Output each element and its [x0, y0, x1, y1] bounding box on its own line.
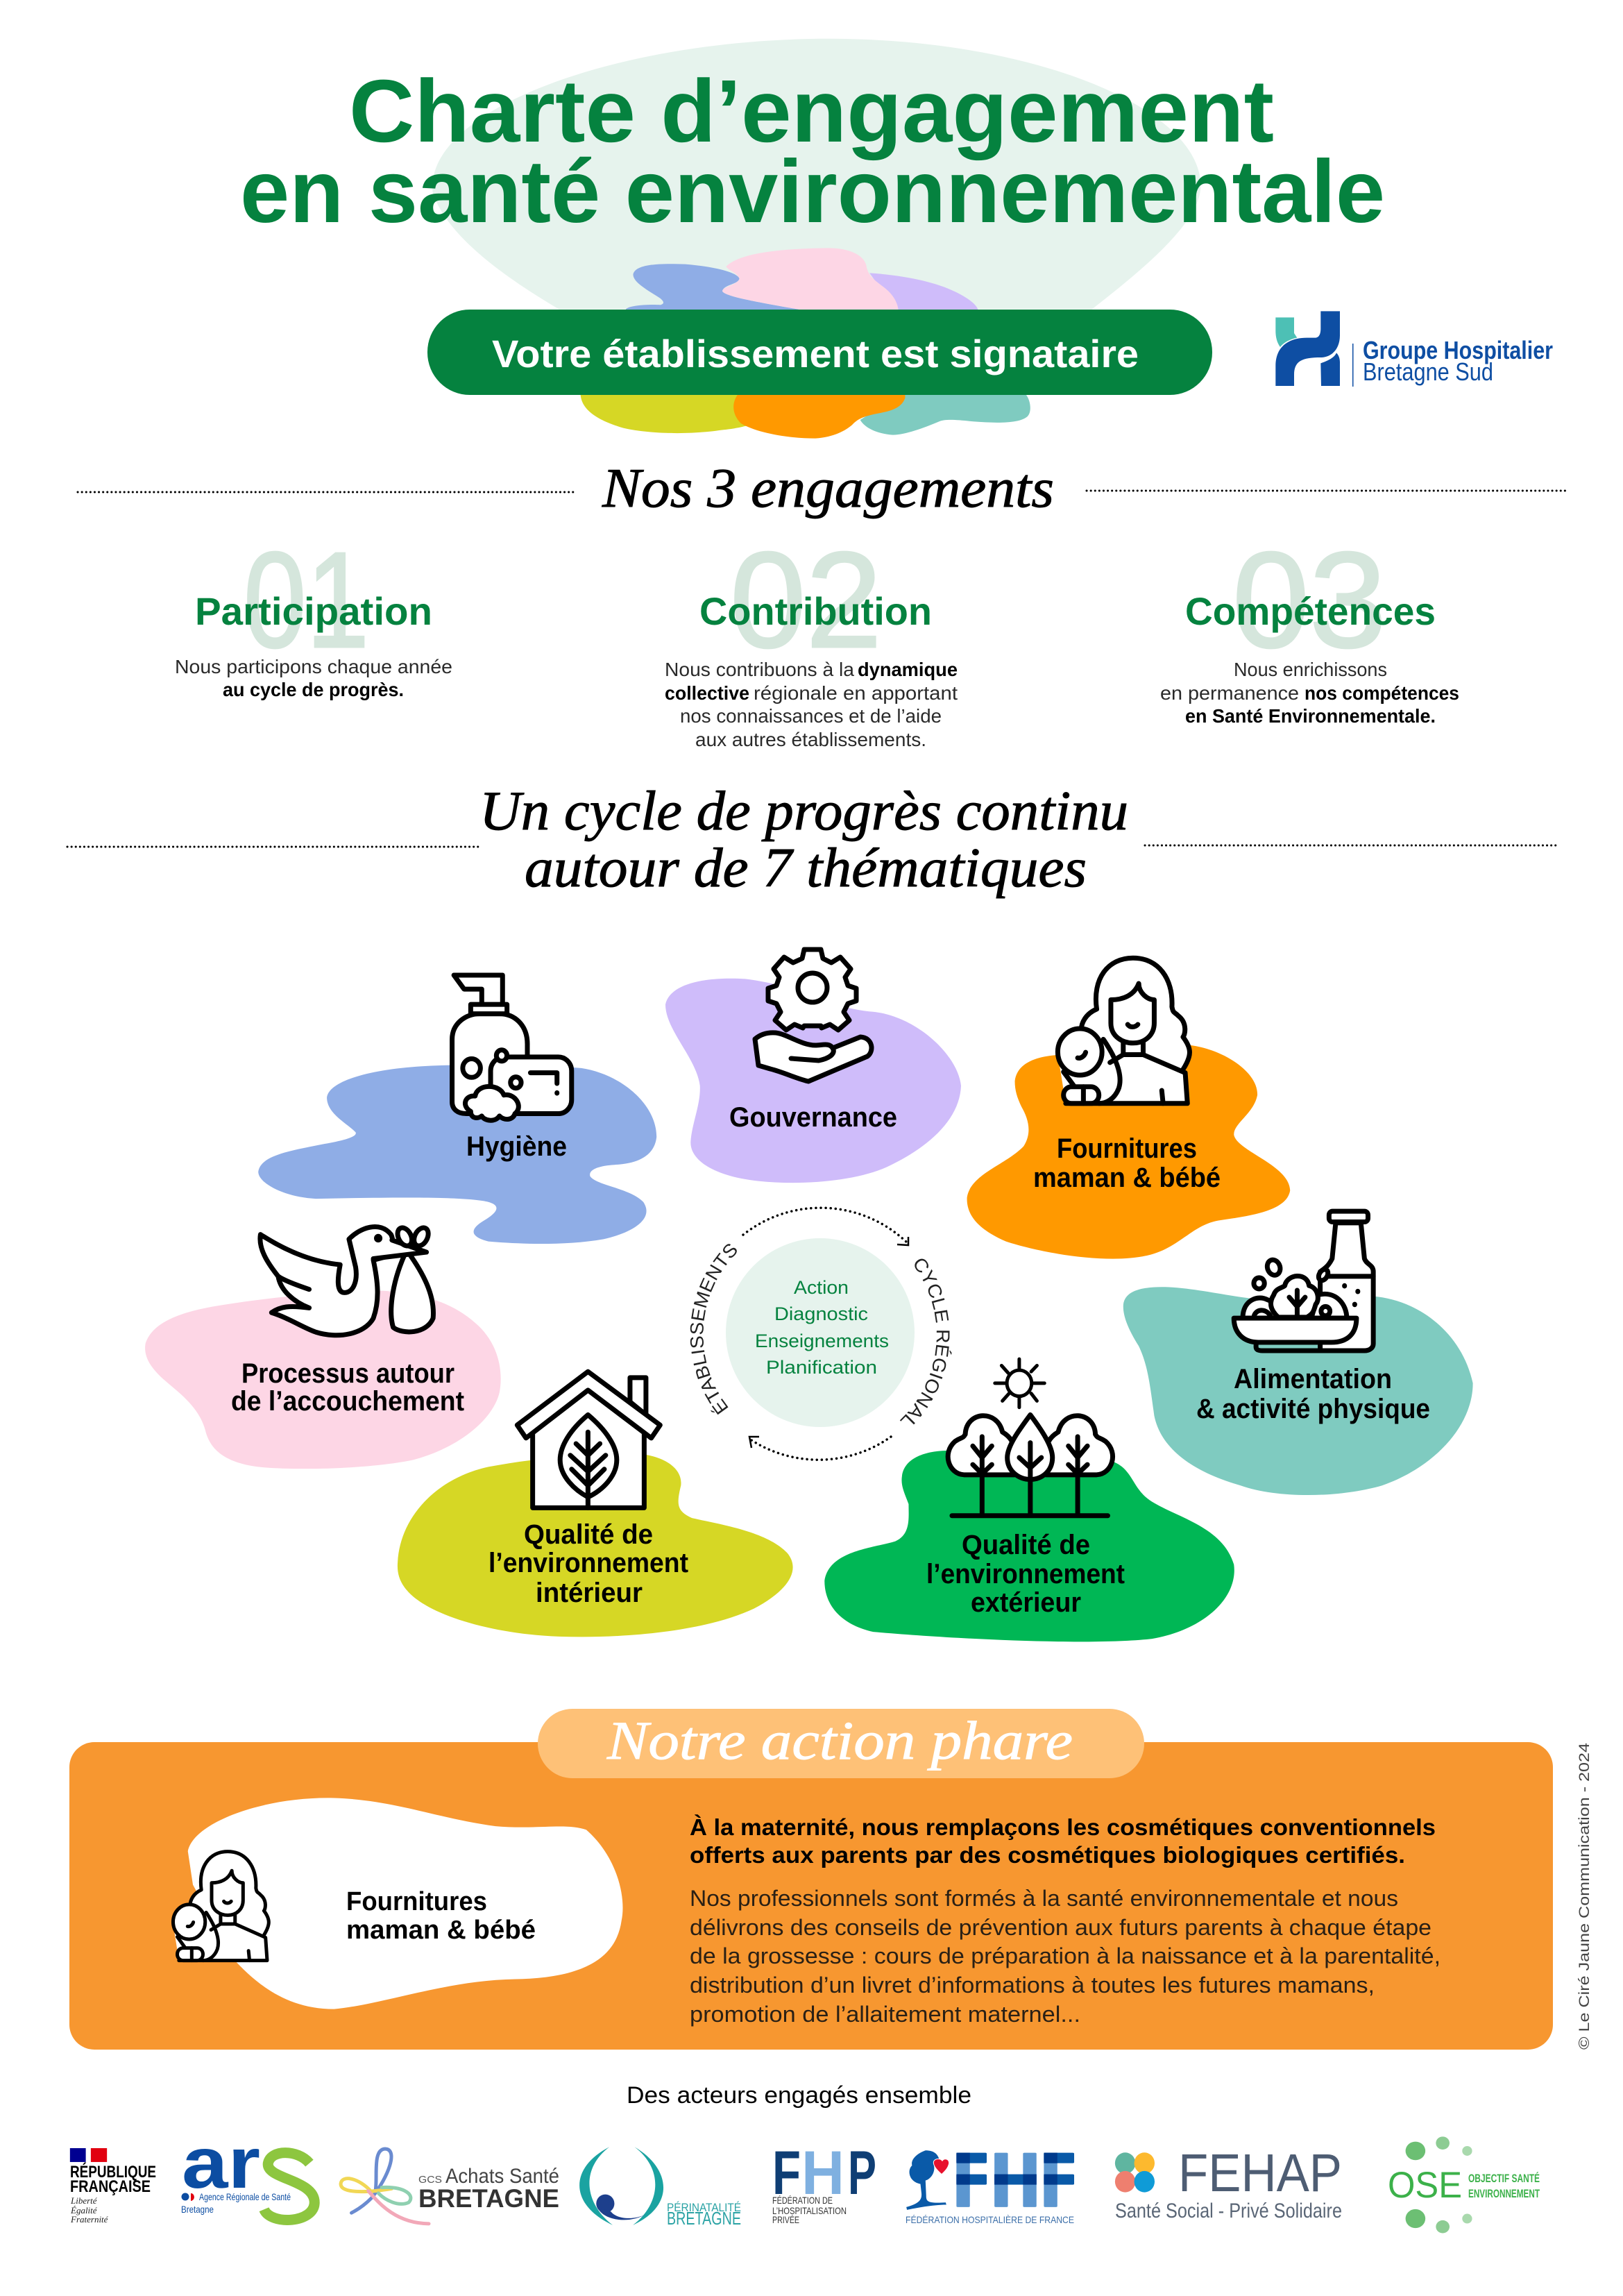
logo: ARS	[181, 2123, 314, 2220]
heading: cycle de progrès	[479, 781, 1128, 899]
cycle diagram	[690, 1206, 952, 1461]
logo: GCS Achats Santé Bretagne	[341, 2149, 559, 2224]
engagement 02: dynamique	[858, 659, 958, 680]
body text: de la grossesse : cours de préparation à la naissance et à la parentalité,	[690, 1943, 1441, 1968]
lead text: À la maternité, nous remplaçons les cosmétiques conventionnels	[690, 1814, 1436, 1840]
logo: FHP: FÉDÉRATION DE	[772, 2195, 833, 2206]
cycle diagram: Action	[794, 1277, 849, 1298]
theme: Fournitures maman & bébé	[967, 958, 1290, 1259]
logo: OSE: ENVIRONNEMENT	[1468, 2187, 1540, 2200]
logo: OSE: OSE	[1388, 2165, 1462, 2206]
logo: OSE	[1388, 2136, 1540, 2234]
engagement 01: Nous participons chaque année	[175, 656, 452, 677]
lead text: offerts aux parents par des cosmétiques biologiques certifiés.	[690, 1842, 1405, 1868]
panel heading pill	[538, 1709, 1144, 1778]
theme: Alimentation	[1123, 1211, 1473, 1495]
engagement 02: aux autres établissements.	[695, 729, 926, 750]
logo: République française: RÉPUBLIQUE	[70, 2162, 156, 2181]
body text: distribution d’un livret d’informations à toutes les futures mamans,	[690, 1973, 1375, 1998]
lead text	[690, 1814, 1436, 1868]
logo: Groupe Hospitalier Bretagne Sud	[1275, 311, 1553, 387]
cycle diagram: CYCLE RÉGIONAL	[899, 1259, 952, 1424]
theme: Processus autour de l'accouchement: Processus autour	[241, 1358, 454, 1389]
icon: house with leaf	[517, 1371, 660, 1508]
icon: gear and hand	[755, 949, 872, 1081]
logo: GCS Achats Santé Bretagne: GCS	[418, 2174, 442, 2186]
logo: Périnatalité Bretagne: BRETAGNE	[667, 2208, 741, 2229]
title	[240, 62, 1385, 242]
engagement 03: Nous enrichissons	[1234, 659, 1387, 680]
engagement 02: Contribution	[699, 589, 932, 633]
logo: FHP: PRIVÉE	[772, 2214, 799, 2225]
engagement 01: au cycle de progrès.	[223, 679, 404, 700]
theme: Fournitures maman & bébé: maman & bébé	[1033, 1163, 1221, 1193]
logo: OSE: OBJECTIF SANTÉ	[1468, 2172, 1540, 2185]
engagement 02: collective	[665, 682, 749, 704]
body text	[690, 1886, 1441, 2027]
heading: cycle de progrès: Un cycle de progrès continu	[479, 781, 1128, 842]
engagement 02: Nous contribuons à la	[665, 659, 854, 680]
logo: FEHAP	[1115, 2143, 1342, 2222]
engagement 01: 01	[244, 524, 369, 676]
logo: République française: Fraternité	[70, 2214, 109, 2225]
theme: Hygiène	[258, 975, 656, 1244]
engagement 01	[175, 524, 452, 700]
logo: FEHAP: FEHAP	[1178, 2143, 1342, 2203]
callout blob: maman & bébé	[346, 1916, 536, 1945]
panel heading pill: Notre action phare	[606, 1710, 1073, 1771]
logo: République française	[70, 2148, 156, 2225]
logo: ARS: ar	[182, 2123, 260, 2204]
theme: Gouvernance: Gouvernance	[729, 1102, 897, 1133]
cycle diagram: ÉTABLISSEMENTS	[690, 1244, 737, 1415]
icon: stork with bundle	[260, 1225, 433, 1335]
logo: FHF	[906, 2150, 1074, 2225]
logo: GCS Achats Santé Bretagne: BRETAGNE	[418, 2184, 559, 2213]
theme: Fournitures maman & bébé: Fournitures	[1057, 1133, 1197, 1164]
theme: Qualité de l'environnement intérieur	[398, 1371, 793, 1637]
theme: Hygiène: Hygiène	[466, 1131, 567, 1162]
callout blob: Fournitures	[346, 1887, 487, 1916]
theme: Alimentation: & activité physique	[1196, 1394, 1430, 1424]
theme: Processus autour de l'accouchement: de l’accouchement	[231, 1386, 464, 1417]
engagement 01: Participation	[195, 589, 432, 633]
cycle diagram: Diagnostic	[774, 1303, 868, 1324]
panel: notre action phare	[69, 1709, 1553, 2050]
cycle diagram: Planification	[766, 1357, 877, 1378]
banner: signatory: Votre établissement est signataire	[492, 332, 1139, 375]
theme: Qualité de l'environnement extérieur: extérieur	[971, 1587, 1081, 1618]
body text: Nos professionnels sont formés à la santé environnementale et nous	[690, 1886, 1398, 1911]
logo: FHP: L’HOSPITALISATION	[772, 2205, 847, 2216]
engagement 02: nos connaissances et de l’aide	[680, 705, 942, 727]
engagement 03: en permanence	[1160, 682, 1299, 704]
logo: FEHAP: Santé Social - Privé Solidaire	[1115, 2200, 1342, 2222]
banner: signatory	[427, 310, 1212, 395]
engagement 03: en Santé Environnementale.	[1185, 705, 1436, 727]
logo: République française: FRANÇAISE	[70, 2177, 151, 2196]
icon: mother and baby	[1057, 958, 1189, 1104]
logo: FHP: F	[772, 2138, 801, 2207]
body text: promotion de l’allaitement maternel...	[690, 2002, 1080, 2027]
logo: Périnatalité Bretagne	[579, 2147, 741, 2229]
logo: FHP	[772, 2138, 876, 2225]
theme: Qualité de l'environnement extérieur	[824, 1359, 1234, 1641]
engagement 03: 03	[1232, 524, 1386, 676]
logo: ARS: Bretagne	[181, 2204, 214, 2215]
engagement 03: Compétences	[1185, 589, 1436, 633]
logo: FHP: H	[801, 2138, 844, 2207]
theme: Qualité de l'environnement intérieur: l’environnement	[488, 1548, 688, 1578]
logo: GCS Achats Santé Bretagne: Achats Santé	[445, 2165, 559, 2188]
logo: Groupe Hospitalier Bretagne Sud: Bretagne Sud	[1363, 357, 1493, 386]
title: en santé environnementale	[240, 142, 1385, 242]
logo: Groupe Hospitalier Bretagne Sud: Groupe Hospitalier	[1363, 336, 1553, 364]
theme: Gouvernance	[665, 949, 961, 1183]
heading: cycle de progrès: autour de 7 thématiques	[525, 838, 1087, 899]
logo: FHF: FÉDÉRATION HOSPITALIÈRE DE FRANCE	[906, 2214, 1074, 2225]
callout blob	[173, 1798, 622, 2009]
icon: sun and trees	[948, 1359, 1113, 1516]
theme: Qualité de l'environnement extérieur: l’environnement	[926, 1559, 1125, 1589]
engagement 03: nos compétences	[1305, 682, 1459, 704]
logo: FHP: P	[848, 2138, 876, 2207]
heading: Nos 3 engagements: Nos 3 engagements	[602, 458, 1054, 519]
logo: République française: Liberté	[70, 2195, 98, 2206]
logo: République française: Égalité	[70, 2205, 98, 2215]
icon: bottle and salad	[1234, 1211, 1373, 1351]
logo: ARS: Agence Régionale de Santé	[199, 2191, 291, 2202]
cycle diagram: Enseignements	[755, 1331, 889, 1351]
theme: Qualité de l'environnement intérieur: Qualité de	[524, 1519, 653, 1550]
icon: soap	[452, 975, 572, 1120]
engagement 02	[665, 524, 958, 750]
engagement 02: régionale en apportant	[754, 682, 958, 704]
copyright: © Le Ciré Jaune Communication - 2024	[1577, 1743, 1592, 2050]
engagement 03	[1160, 524, 1459, 727]
partners heading: Des acteurs engagés ensemble	[627, 2082, 971, 2109]
logo: Périnatalité Bretagne: PÉRINATALITÉ	[667, 2201, 741, 2214]
theme: Qualité de l'environnement intérieur: intérieur	[536, 1578, 643, 1608]
theme: Processus autour de l'accouchement	[145, 1225, 501, 1469]
body text: délivrons des conseils de prévention aux futurs parents à chaque étape	[690, 1915, 1431, 1940]
engagement 02: 02	[730, 524, 882, 676]
colored blobs around the signatory banner	[581, 248, 1030, 439]
theme: Alimentation: Alimentation	[1234, 1364, 1392, 1394]
title: Charte d’engagement	[349, 62, 1274, 161]
title background bulb	[432, 39, 1200, 310]
theme: Qualité de l'environnement extérieur: Qualité de	[962, 1530, 1090, 1560]
icon: mother and baby small	[173, 1852, 269, 1961]
